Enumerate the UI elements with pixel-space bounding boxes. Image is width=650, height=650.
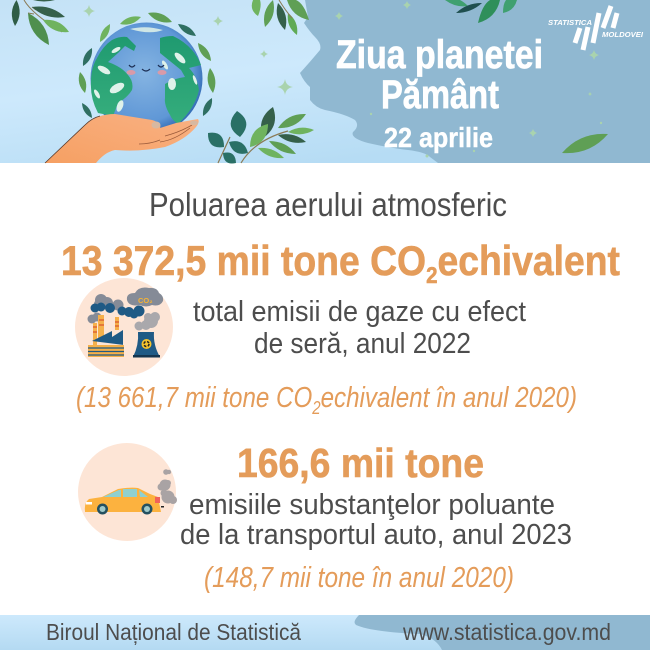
icon: factory and nuclear cooling tower xyxy=(75,278,173,376)
CO2 cloud: CO₂ xyxy=(138,296,153,305)
footer xyxy=(0,615,650,650)
tower smoke xyxy=(134,312,160,330)
logo: Statistica Moldovei: STATISTICA xyxy=(548,18,592,27)
leaf: bottom right xyxy=(562,134,608,153)
date: 22 aprilie xyxy=(384,122,493,153)
sparkles xyxy=(83,1,602,158)
footer: website: www.statistica.gov.md xyxy=(402,619,611,645)
logo: Statistica Moldovei xyxy=(548,6,644,50)
header blue wave background xyxy=(300,0,650,163)
icon: car with exhaust smoke xyxy=(78,443,177,541)
chimneys xyxy=(93,315,119,345)
stat: total emissions: echivalent xyxy=(437,237,620,284)
text: road transport pollutants xyxy=(180,489,572,551)
text: total greenhouse emissions xyxy=(193,296,526,360)
stat: transport emissions: 166,6 mii tone xyxy=(237,440,484,486)
heading: air pollution: Poluarea aerului atmosferic xyxy=(149,186,507,223)
factory building xyxy=(88,330,124,357)
text: total greenhouse emissions: de seră, anul 2022 xyxy=(254,328,471,360)
leaves: top over blue wave xyxy=(445,0,517,23)
header banner xyxy=(0,0,650,164)
gray smoke xyxy=(88,294,124,324)
comparison: 2020 emissions: echivalent în anul 2020) xyxy=(321,382,577,414)
comparison: 2020 transport emissions: (148,7 mii tone în anul 2020) xyxy=(204,562,514,594)
title: Ziua planetei xyxy=(336,33,543,77)
text: road transport pollutants: de la transportul auto, anul 2023 xyxy=(180,519,572,551)
blue smoke xyxy=(90,302,144,318)
footer: organisation name: Biroul Național de Statistică xyxy=(46,619,301,645)
leaves: ring around globe xyxy=(79,12,215,118)
comparison: 2020 emissions: 2 xyxy=(311,398,321,418)
text: total greenhouse emissions: total emisii de gaze cu efect xyxy=(193,296,526,328)
title xyxy=(336,33,543,117)
stat: total emissions: 2 xyxy=(426,262,437,288)
cooling tower xyxy=(133,332,160,357)
leaves: top left xyxy=(12,0,69,45)
leaves: top right xyxy=(252,0,309,35)
leaves: bottom branches xyxy=(208,107,314,164)
icon: cupped hand xyxy=(45,114,199,163)
stat: total emissions: 13 372,5 mii tone CO xyxy=(61,237,472,284)
text: road transport pollutants: emisiile substanţelor poluante xyxy=(189,489,555,521)
icon: smiling earth globe xyxy=(90,22,202,134)
comparison: 2020 emissions: (13 661,7 mii tone CO xyxy=(76,382,360,414)
title: Pământ xyxy=(381,73,499,117)
logo: Statistica Moldovei: MOLDOVEI xyxy=(602,30,644,39)
